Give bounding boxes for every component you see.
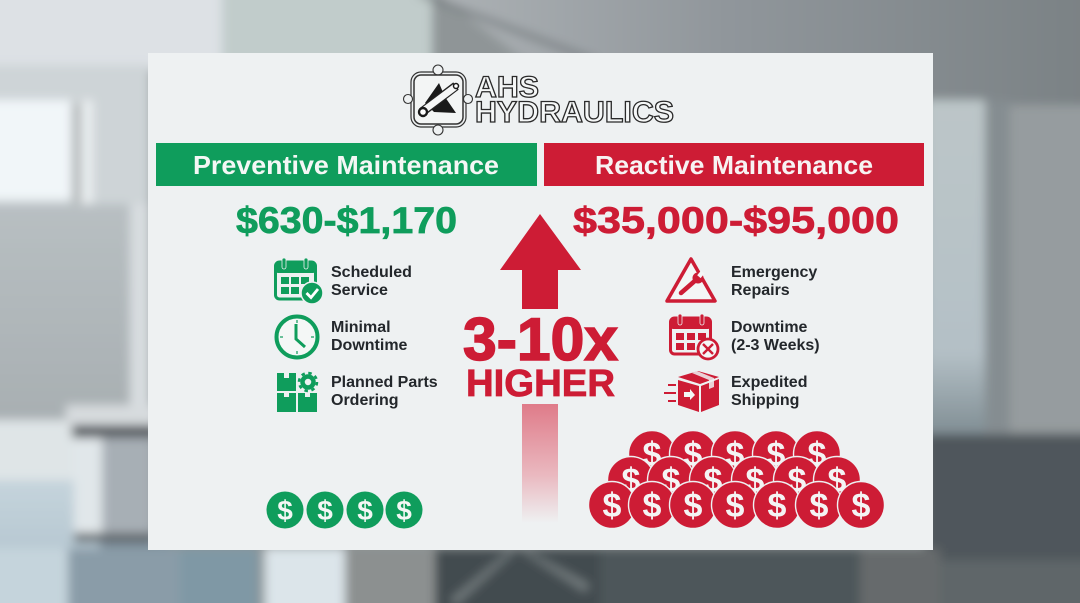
list: preventive benefits xyxy=(275,258,438,412)
icon: clock xyxy=(276,316,318,358)
icon: calendar x xyxy=(670,314,718,359)
text: scheduled service: Service xyxy=(331,282,388,299)
main panel xyxy=(148,53,933,550)
logo wordmark: HYDRAULICS xyxy=(475,96,674,129)
center arrow callout xyxy=(463,214,618,523)
text: planned parts ordering: Planned Parts xyxy=(331,374,438,391)
price: preventive: $630-$1,170 xyxy=(236,200,457,241)
arrow up: top xyxy=(500,214,581,309)
text: expedited shipping: Shipping xyxy=(731,392,799,409)
text: planned parts ordering: Ordering xyxy=(331,392,399,409)
text: minimal downtime: Minimal xyxy=(331,319,391,336)
header: reactive maintenance xyxy=(544,143,924,186)
header: preventive maintenance xyxy=(156,143,537,186)
logo: AHS Hydraulics xyxy=(404,65,674,135)
text: scheduled service: Scheduled xyxy=(331,264,412,281)
icon: calendar check xyxy=(275,258,323,304)
text: minimal downtime: Downtime xyxy=(331,337,408,354)
text: emergency repairs: Emergency xyxy=(731,264,817,281)
logo wordmark xyxy=(475,71,674,129)
header: preventive maintenance: Preventive Maintenance xyxy=(193,150,499,180)
text: emergency repairs: Repairs xyxy=(731,282,790,299)
icon: warning wrench xyxy=(667,259,715,301)
text: expedited shipping: Expedited xyxy=(731,374,807,391)
logo wordmark: AHS xyxy=(475,71,539,104)
icon: speeding box xyxy=(664,371,719,412)
text: downtime 2-3 weeks: Downtime xyxy=(731,319,808,336)
logo icon xyxy=(404,65,472,135)
header: reactive maintenance: Reactive Maintenance xyxy=(595,150,873,180)
coins: reactive pile xyxy=(588,430,884,528)
price: reactive: $35,000-$95,000 xyxy=(573,200,899,241)
callout: higher: HIGHER xyxy=(466,363,615,405)
callout: 3-10x: 3-10x xyxy=(463,306,618,373)
coins: preventive xyxy=(266,492,422,528)
text: downtime 2-3 weeks: (2-3 Weeks) xyxy=(731,337,820,354)
list: reactive costs xyxy=(664,259,820,412)
icon: boxes and gear xyxy=(277,373,317,412)
arrow shaft: fading xyxy=(522,404,558,523)
